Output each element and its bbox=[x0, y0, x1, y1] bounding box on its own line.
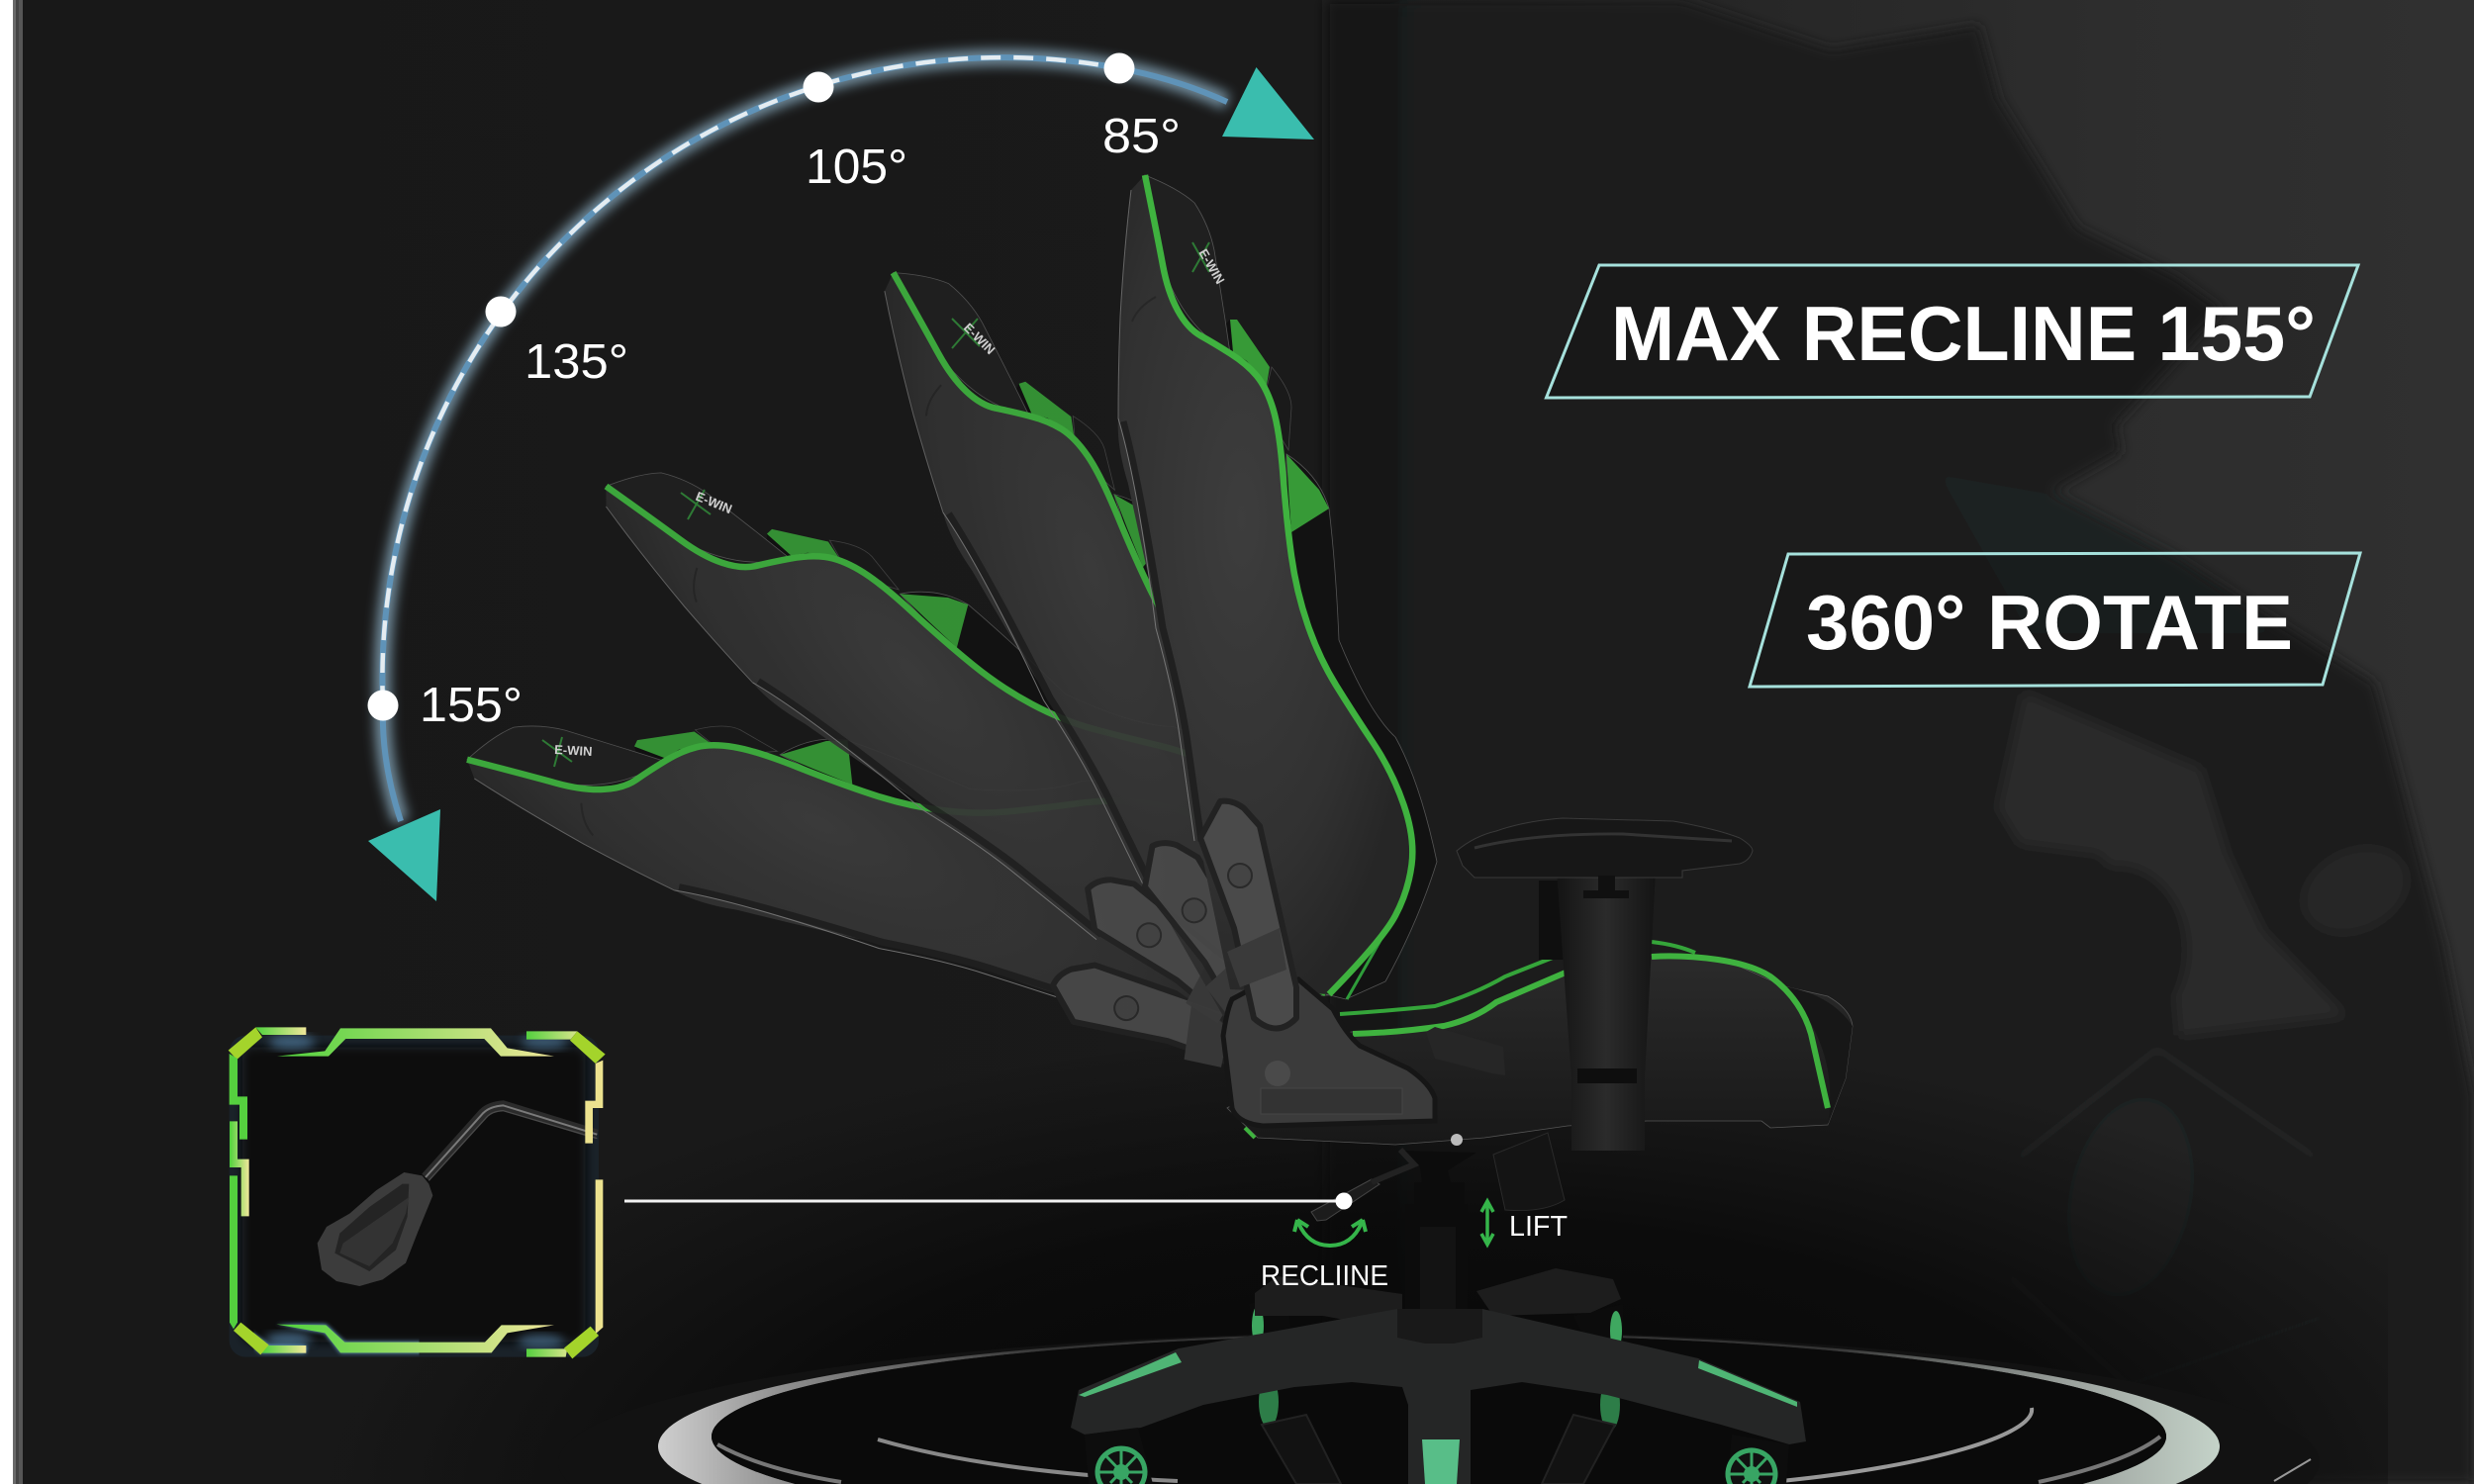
label: 155°: 155° bbox=[420, 679, 523, 732]
backrest at 155° bbox=[455, 498, 1336, 1145]
logo 155°: E-WIN bbox=[554, 742, 593, 759]
recline lever bbox=[1311, 1150, 1414, 1221]
marker: 85° bbox=[1104, 53, 1134, 83]
label: 85°: 85° bbox=[1102, 110, 1181, 163]
arrow: recline bbox=[1294, 1220, 1366, 1246]
recline arc bbox=[368, 53, 1314, 901]
icon: lever handle bbox=[318, 1105, 597, 1286]
background figure silhouette bbox=[1326, 0, 2474, 1484]
rear caster: left bbox=[1249, 1296, 1341, 1484]
star base bbox=[1071, 1268, 1806, 1484]
arrowhead: 155° end bbox=[368, 809, 440, 901]
label: recline: RECLIINE bbox=[1261, 1260, 1388, 1292]
frame: left side bbox=[230, 1054, 249, 1329]
frame: top left bbox=[229, 1027, 306, 1060]
logo 105°: E-WIN bbox=[961, 321, 999, 357]
logo 85°: E-WIN bbox=[1195, 246, 1228, 287]
frame: top right bbox=[526, 1031, 606, 1064]
arrow: lift bbox=[1481, 1201, 1493, 1245]
marker: 105° bbox=[804, 71, 833, 103]
arrowhead: 85° end bbox=[1222, 67, 1314, 139]
label: 105°: 105° bbox=[806, 140, 907, 194]
rear caster: right bbox=[1542, 1304, 1623, 1484]
front caster: left bbox=[1085, 1428, 1153, 1484]
callout: rotate: 360° ROTATE bbox=[1806, 579, 2293, 666]
front caster: right bbox=[1725, 1435, 1789, 1484]
callout: max recline bbox=[1546, 265, 2358, 398]
backrest at 135° bbox=[586, 287, 1381, 1107]
logo 135°: E-WIN bbox=[694, 489, 734, 516]
backrest at 85° bbox=[1118, 175, 1437, 999]
logo 155° bbox=[542, 737, 593, 767]
logo 135° bbox=[681, 489, 734, 519]
callout: rotate bbox=[1750, 553, 2360, 687]
marker: 155° bbox=[368, 691, 398, 720]
panel: lever detail bbox=[229, 1027, 606, 1358]
hinge base bbox=[1200, 801, 1435, 1138]
label: lift: LIFT bbox=[1509, 1211, 1568, 1243]
label: 135°: 135° bbox=[524, 335, 628, 389]
chair bbox=[455, 175, 1853, 1484]
leader line from lever to detail panel bbox=[624, 1193, 1352, 1209]
frame: top centre bbox=[277, 1028, 554, 1057]
platform bbox=[558, 1332, 2320, 1484]
marker: 135° bbox=[485, 297, 517, 326]
frame: bottom centre bbox=[276, 1325, 554, 1352]
seat bbox=[1227, 942, 1853, 1145]
gas cylinder and mechanism bbox=[1402, 1133, 1565, 1316]
floor shadow bbox=[0, 989, 2388, 1484]
frame: bottom left bbox=[234, 1323, 306, 1354]
frame: bottom right bbox=[526, 1327, 599, 1358]
backrest at 105° bbox=[868, 182, 1426, 1068]
armrest bbox=[1457, 818, 1753, 1151]
frame: right side bbox=[585, 1061, 603, 1334]
frame: glow bbox=[229, 1027, 606, 1358]
callout: max recline: MAX RECLINE 155° bbox=[1611, 290, 2316, 377]
